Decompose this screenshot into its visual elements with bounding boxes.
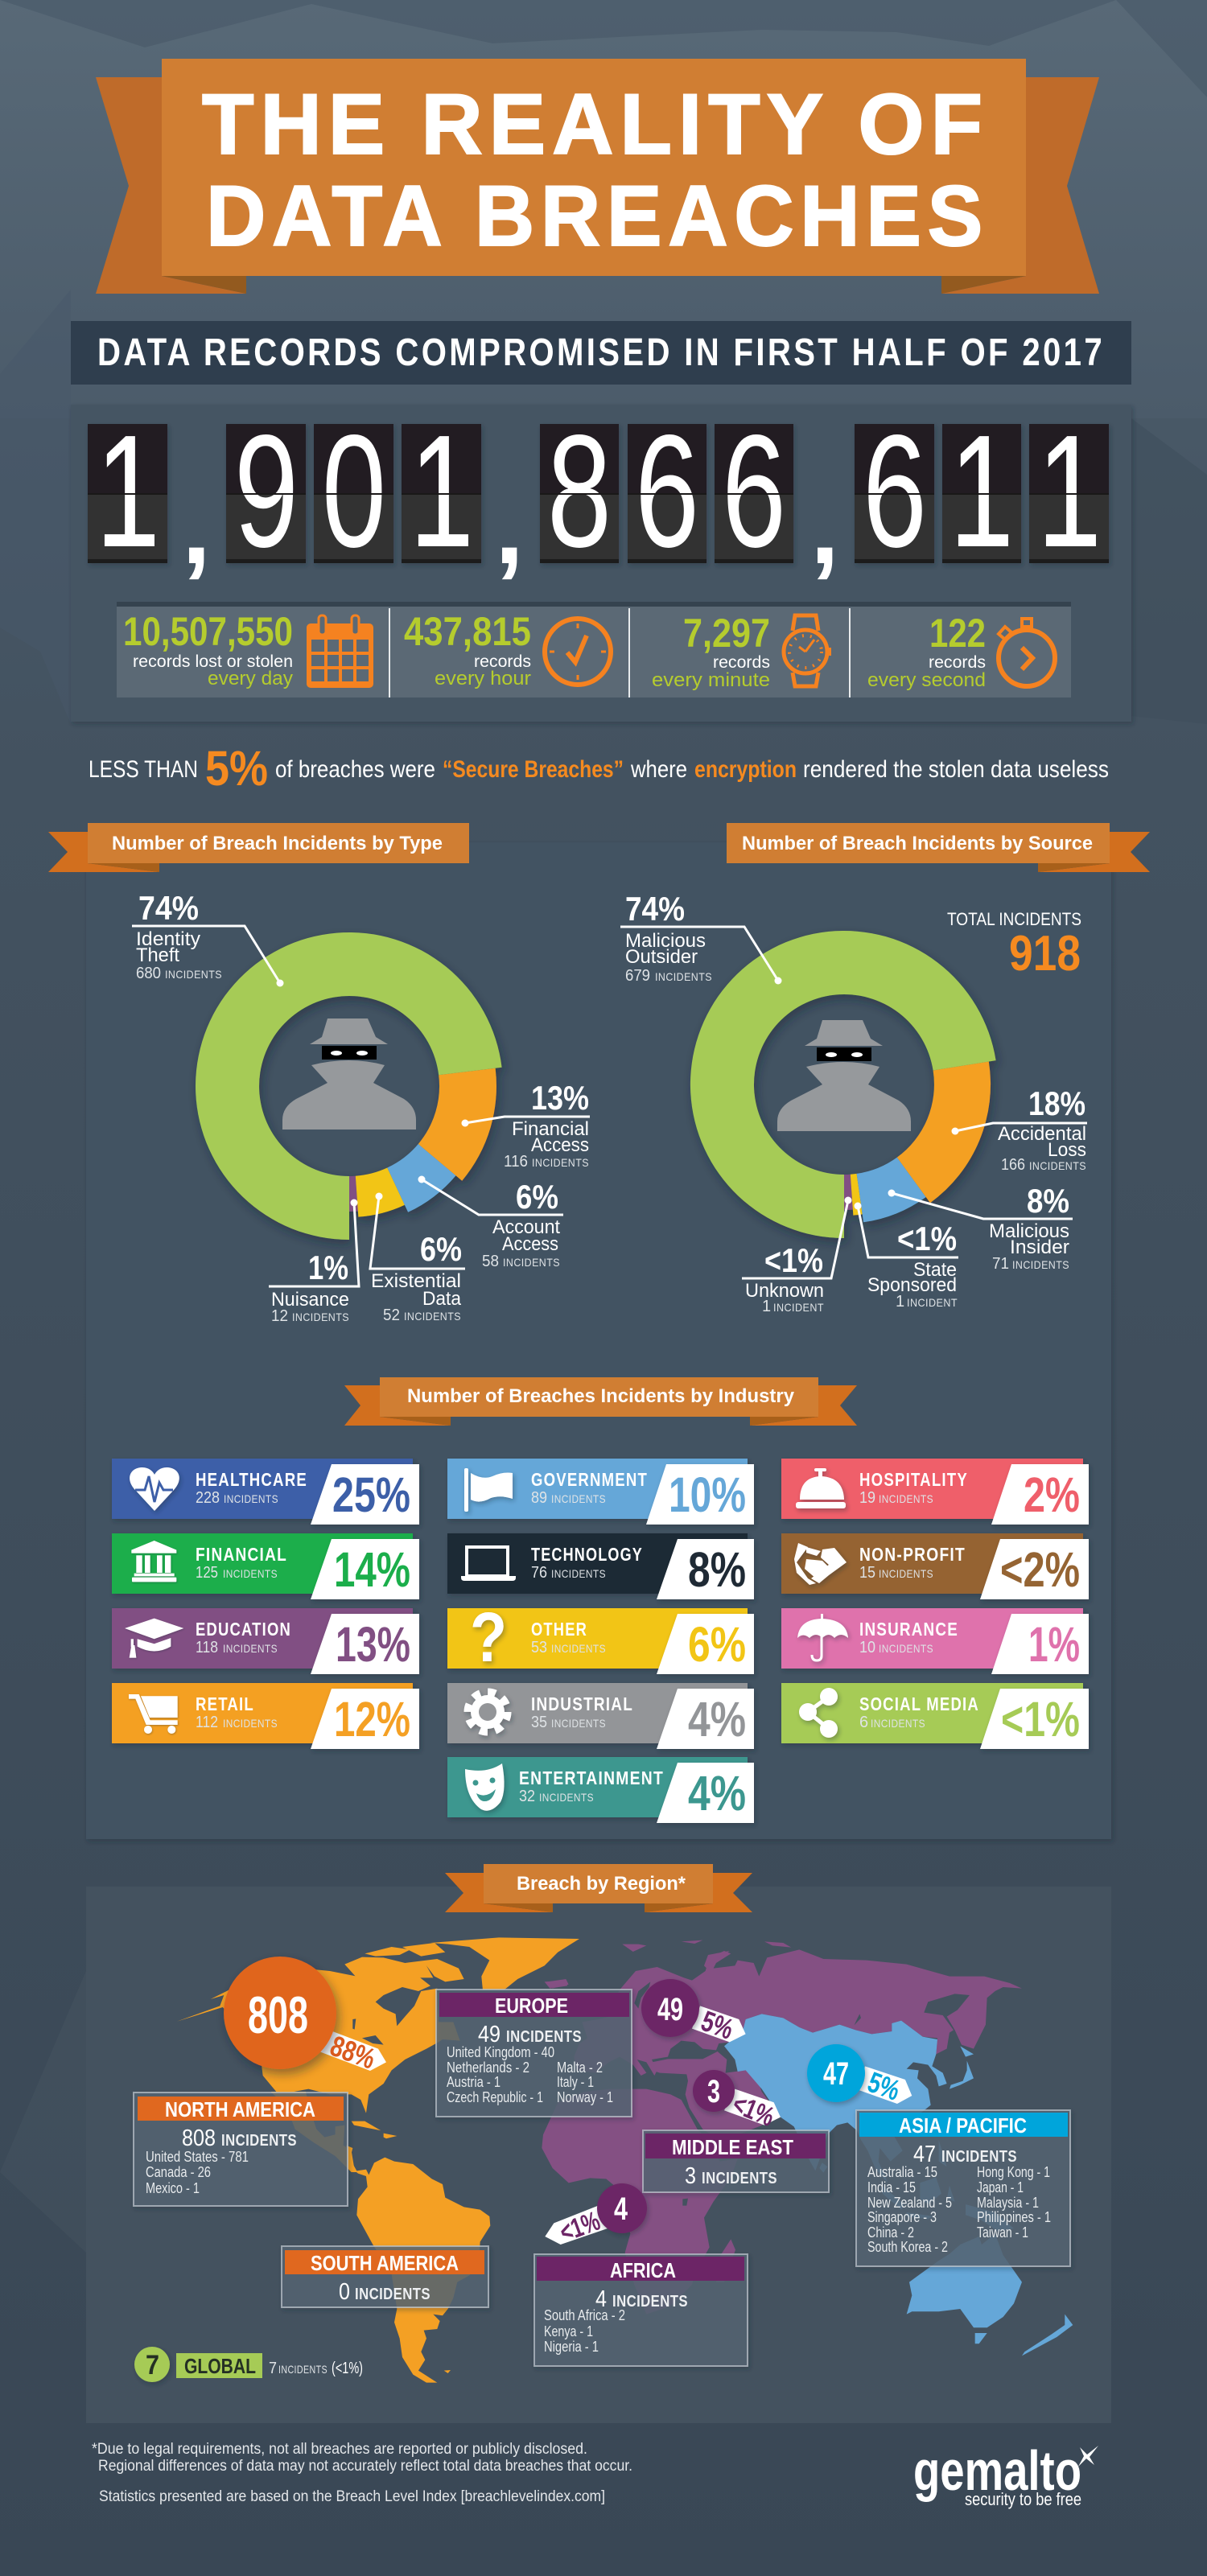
card: government [447, 1459, 754, 1525]
heading: incidents by type [48, 823, 469, 872]
stat: per minute: 7,297 [683, 611, 770, 656]
world map [177, 1937, 1073, 2383]
marker: asia pacific 47: 47 [823, 2056, 849, 2092]
stat: per hour [404, 609, 531, 689]
callout: unknown: Unknown [745, 1280, 824, 1302]
card: other: 53 [531, 1639, 547, 1656]
callout: north america: Canada - 26 [146, 2164, 211, 2180]
card: entertainment [447, 1757, 754, 1823]
callout: europe: 49 [478, 2022, 501, 2047]
secure breaches statement: where [630, 756, 687, 783]
title banner: THE REALITY OF [202, 76, 989, 172]
card: financial: 125 [196, 1564, 218, 1582]
flip counter digits: , [810, 468, 839, 586]
callout: south america [282, 2246, 488, 2307]
callout: africa: 4 [595, 2286, 607, 2312]
callout: europe: EUROPE [495, 1994, 568, 2018]
callout: state sponsored: <1% [897, 1220, 957, 1257]
callout: malicious insider: 71 [992, 1255, 1009, 1273]
panel: incidents background [86, 842, 1111, 1839]
stat: per day: records lost or stolen [133, 652, 293, 671]
heading: incidents by source: Number of Breach Incidents by Source [742, 833, 1093, 854]
callout: financial access [462, 1079, 590, 1171]
callout: asia pacific: ASIA / PACIFIC [899, 2113, 1027, 2138]
callout: existential data: 52 [383, 1307, 400, 1324]
callout: financial access: 13% [531, 1079, 589, 1117]
callout: europe [436, 1990, 632, 2117]
global incidents: 7 [269, 2360, 277, 2377]
card: social media: 6 [859, 1714, 868, 1731]
card: insurance: INCIDENTS [879, 1642, 933, 1655]
card: retail: 112 [196, 1714, 218, 1731]
icon: handshake [794, 1543, 847, 1585]
callout: north america [134, 2092, 348, 2206]
callout: nuisance: Nuisance [271, 1289, 349, 1311]
card: government: INCIDENTS [551, 1492, 606, 1505]
callout: asia pacific: Malaysia - 1 [977, 2195, 1039, 2211]
card: other: INCIDENTS [551, 1642, 606, 1655]
marker: asia pacific 47 [807, 2044, 912, 2107]
callout: identity theft: INCIDENTS [165, 968, 222, 981]
callout: middle east [643, 2130, 829, 2192]
card: technology: 76 [531, 1564, 547, 1582]
secure breaches statement [89, 741, 1109, 796]
title banner [96, 59, 1099, 294]
card: education: INCIDENTS [223, 1642, 278, 1655]
callout: accidental loss [951, 1084, 1087, 1174]
callout: account access: 58 [482, 1253, 499, 1270]
card: government: 89 [531, 1489, 547, 1507]
card: entertainment: 32 [519, 1788, 535, 1805]
callout: state sponsored: State [913, 1259, 957, 1281]
card: non-profit [781, 1533, 1089, 1599]
card: healthcare: INCIDENTS [224, 1492, 278, 1505]
card: social media: SOCIAL MEDIA [859, 1693, 979, 1714]
card: other: OTHER [531, 1619, 587, 1640]
card: non-profit: 15 [859, 1564, 875, 1582]
secure breaches statement: 5% [205, 741, 268, 796]
callout: identity theft: 74% [138, 889, 199, 927]
callout: malicious outsider: 679 [625, 967, 650, 985]
callout: nuisance: 1% [308, 1249, 348, 1286]
logo: gemalto: gemalto [913, 2439, 1081, 2502]
callout: asia pacific: New Zealand - 5 [867, 2195, 952, 2211]
global incidents: 7 [146, 2350, 159, 2381]
callout: unknown: 1 [762, 1298, 771, 1315]
callout: europe: Austria - 1 [447, 2074, 501, 2090]
secure breaches statement: encryption [694, 756, 797, 783]
card: healthcare [112, 1459, 419, 1525]
card: education: 13% [336, 1617, 410, 1672]
card: education: EDUCATION [196, 1619, 291, 1640]
donut chart: by source [620, 890, 1087, 1315]
footnotes [92, 2441, 632, 2505]
callout: account access [418, 1176, 563, 1270]
icon: spy [282, 1018, 416, 1130]
callout: nuisance: 12 [271, 1307, 288, 1325]
callout: unknown: <1% [764, 1241, 823, 1279]
callout: malicious insider: 8% [1027, 1182, 1069, 1220]
callout: nuisance: INCIDENTS [292, 1311, 349, 1323]
flip counter digits: 9 [234, 402, 299, 581]
callout: asia pacific [856, 2110, 1070, 2266]
callout: asia pacific: Philippines - 1 [977, 2209, 1051, 2225]
callout: malicious outsider: Outsider [625, 946, 698, 968]
secure breaches statement: rendered the stolen data useless [803, 756, 1109, 783]
callout: middle east: MIDDLE EAST [672, 2135, 793, 2159]
callout: existential data: INCIDENTS [404, 1310, 461, 1323]
stat: per hour: 437,815 [404, 609, 531, 654]
callout: malicious outsider [620, 890, 782, 985]
callout: asia pacific: 47 [913, 2142, 936, 2167]
callout: accidental loss: Loss [1048, 1139, 1086, 1161]
callout: africa: Nigeria - 1 [544, 2339, 599, 2355]
card: healthcare: HEALTHCARE [196, 1469, 307, 1490]
card: government: 10% [669, 1467, 746, 1522]
card: hospitality [781, 1459, 1089, 1525]
icon: wristwatch [784, 615, 831, 686]
card: industrial: INCIDENTS [551, 1717, 606, 1730]
callout: financial access: 116 [504, 1153, 528, 1171]
card: industrial: 35 [531, 1714, 547, 1731]
logo: gemalto: security to be free [965, 2489, 1081, 2509]
stat: per second: records [929, 653, 986, 672]
flip counter digits: , [182, 468, 211, 586]
map: asia and australia [724, 2014, 1073, 2356]
map: north america [177, 1937, 579, 2172]
flip counter digits: 0 [322, 402, 386, 581]
heading: breach by region [445, 1864, 752, 1912]
callout: financial access: INCIDENTS [532, 1156, 589, 1169]
callout: existential data: Existential [371, 1270, 461, 1292]
callout: north america: Mexico - 1 [146, 2180, 200, 2196]
callout: identity theft: Theft [136, 944, 179, 966]
icon: clock [545, 619, 611, 685]
callout: existential data: Data [422, 1288, 462, 1310]
callout: asia pacific: India - 15 [867, 2179, 916, 2195]
card: technology: 8% [688, 1542, 746, 1597]
card: insurance [781, 1608, 1089, 1674]
heading: incidents by industry [344, 1377, 857, 1426]
footnotes: Statistics presented are based on the Breach Level Index [breachlevelindex.com] [99, 2488, 605, 2505]
callout: malicious insider: INCIDENTS [1012, 1258, 1069, 1271]
card: education [112, 1608, 419, 1674]
title banner: DATA BREACHES [206, 167, 989, 264]
card: industrial: 4% [688, 1692, 746, 1747]
callout: asia pacific: Singapore - 3 [867, 2209, 937, 2225]
card: non-profit: <2% [1000, 1542, 1080, 1597]
card: other [447, 1599, 754, 1677]
flip counter digits [88, 402, 1109, 586]
card: insurance: 10 [859, 1639, 875, 1656]
icon: stopwatch [999, 619, 1055, 686]
stat: per day: 10,507,550 [123, 609, 293, 654]
callout: africa: INCIDENTS [612, 2293, 688, 2311]
global incidents: INCIDENTS [278, 2363, 327, 2376]
flip counter digits: , [495, 468, 524, 586]
callout: state sponsored: 1 [896, 1293, 904, 1311]
callout: africa: AFRICA [610, 2258, 676, 2282]
map: south america [346, 2146, 490, 2383]
heading: breach by region: Breach by Region* [517, 1873, 686, 1895]
flip counter digits: 6 [863, 402, 927, 581]
marker: north america 808: 808 [248, 1985, 308, 2044]
global incidents: (<1%) [332, 2360, 363, 2377]
callout: existential data [370, 1192, 465, 1324]
global incidents [134, 2347, 363, 2382]
marker: asia pacific 47: 5% [863, 2065, 904, 2107]
card: financial: FINANCIAL [196, 1544, 287, 1565]
icon: heart [130, 1467, 179, 1511]
card: entertainment: 4% [688, 1766, 746, 1821]
callout: unknown [742, 1197, 851, 1315]
card: social media: INCIDENTS [871, 1717, 925, 1730]
total incidents [947, 909, 1081, 981]
total incidents: 918 [1009, 926, 1081, 981]
callout: identity theft [132, 889, 283, 986]
callout: state sponsored [855, 1202, 958, 1311]
marker: europe 49: 5% [697, 2004, 738, 2046]
marker: europe 49: 49 [657, 1992, 683, 2027]
card: technology [447, 1533, 754, 1599]
marker: north america 808: 88% [326, 2029, 380, 2076]
card: hospitality: 2% [1024, 1467, 1080, 1522]
callout: malicious insider: Insider [1010, 1237, 1069, 1258]
icon: graduation cap [125, 1619, 183, 1658]
stat: per hour: records [474, 652, 531, 671]
flip counter digits: 1 [96, 402, 160, 581]
icon: question mark: ? [470, 1599, 507, 1677]
callout: europe: Italy - 1 [557, 2074, 594, 2090]
flip counter digits: 1 [1037, 402, 1102, 581]
callout: state sponsored: INCIDENT [907, 1296, 958, 1309]
callout: accidental loss: 18% [1028, 1084, 1085, 1122]
callout: asia pacific: China - 2 [867, 2224, 914, 2241]
callout: malicious insider: Malicious [989, 1220, 1069, 1242]
callout: financial access: Access [531, 1134, 589, 1156]
card: social media [781, 1683, 1089, 1749]
callout: nuisance [269, 1199, 359, 1325]
card: retail: INCIDENTS [223, 1717, 278, 1730]
icon: bank [131, 1541, 176, 1582]
stat: per second [867, 611, 986, 691]
callout: africa [534, 2254, 748, 2366]
card: industrial: INDUSTRIAL [531, 1693, 633, 1714]
callout: africa: South Africa - 2 [544, 2307, 625, 2323]
card: government: GOVERNMENT [531, 1469, 648, 1490]
callout: unknown: INCIDENT [773, 1301, 824, 1314]
subheading bar [71, 321, 1131, 385]
callout: south america: INCIDENTS [355, 2286, 430, 2303]
card: technology: TECHNOLOGY [531, 1544, 643, 1565]
callout: existential data: 6% [420, 1230, 462, 1268]
card: non-profit: INCIDENTS [879, 1567, 933, 1580]
card: healthcare: 228 [196, 1489, 220, 1507]
panel: region background [86, 1887, 1111, 2423]
card: entertainment: ENTERTAINMENT [519, 1767, 664, 1788]
icon: calendar [307, 615, 373, 688]
callout: malicious insider [888, 1182, 1073, 1273]
card: retail: RETAIL [196, 1693, 254, 1714]
callout: europe: Czech Republic - 1 [447, 2089, 543, 2105]
map: africa [542, 2089, 738, 2315]
callout: north america: 808 [182, 2125, 216, 2151]
callout: asia pacific: INCIDENTS [941, 2148, 1017, 2166]
card: social media: <1% [1001, 1692, 1080, 1747]
flip counter digits: 1 [950, 402, 1014, 581]
callout: north america: NORTH AMERICA [165, 2097, 315, 2121]
callout: accidental loss: INCIDENTS [1029, 1159, 1086, 1172]
callout: europe: Norway - 1 [557, 2089, 613, 2105]
marker: middle east 3: <1% [728, 2088, 778, 2133]
callout: state sponsored: Sponsored [867, 1274, 957, 1296]
card: industrial [447, 1683, 754, 1749]
callout: asia pacific: Japan - 1 [977, 2179, 1024, 2195]
stat: per minute: records [713, 653, 770, 672]
callout: europe: Netherlands - 2 [447, 2060, 529, 2076]
icon: gear [468, 1692, 508, 1732]
card: technology: INCIDENTS [551, 1567, 606, 1580]
callout: account access: INCIDENTS [503, 1256, 560, 1269]
callout: europe: Malta - 2 [557, 2060, 603, 2076]
callout: malicious outsider: INCIDENTS [655, 970, 712, 983]
flip counter digits: 1 [410, 402, 474, 581]
total incidents: TOTAL INCIDENTS [947, 909, 1081, 929]
card: insurance: 1% [1028, 1617, 1080, 1672]
card: financial: 14% [334, 1542, 410, 1597]
marker: north america 808 [224, 1957, 386, 2076]
card: hospitality: INCIDENTS [879, 1492, 933, 1505]
stat: per hour: every hour [435, 668, 531, 689]
footnotes: *Due to legal requirements, not all breaches are reported or publicly disclosed. [92, 2441, 587, 2458]
callout: north america: United States - 781 [146, 2149, 249, 2165]
panel: records counter [71, 402, 1131, 722]
flip counter digits: 6 [722, 402, 786, 581]
flip counter digits: 6 [635, 402, 699, 581]
callout: europe: INCIDENTS [506, 2028, 582, 2046]
card: financial: INCIDENTS [223, 1567, 278, 1580]
footnotes: Regional differences of data may not accurately reflect total data breaches that occur. [98, 2458, 632, 2475]
card: hospitality: HOSPITALITY [859, 1469, 968, 1490]
callout: malicious outsider: 74% [625, 890, 685, 928]
callout: asia pacific: South Korea - 2 [867, 2239, 948, 2255]
card: retail [112, 1683, 419, 1749]
card: healthcare: 25% [332, 1467, 410, 1522]
stats strip [117, 602, 1071, 697]
callout: accidental loss: 166 [1001, 1156, 1025, 1174]
callout: asia pacific: Australia - 15 [867, 2164, 937, 2180]
secure breaches statement: “Secure Breaches” [443, 756, 624, 783]
stat: per minute: every minute [652, 669, 770, 691]
marker: middle east 3 [693, 2070, 781, 2133]
global incidents: GLOBAL [184, 2354, 256, 2378]
marker: middle east 3: 3 [707, 2074, 720, 2109]
card: education: 118 [196, 1639, 218, 1656]
card: hospitality: 19 [859, 1489, 875, 1507]
heading: incidents by type: Number of Breach Incidents by Type [112, 833, 443, 854]
icon: umbrella [797, 1614, 848, 1660]
marker: europe 49 [641, 1979, 746, 2046]
heading: incidents by source [727, 823, 1150, 872]
card: retail: 12% [334, 1692, 410, 1747]
marker: africa 4: 4 [614, 2191, 628, 2227]
icon: theatre mask [465, 1763, 505, 1811]
icon: flag [464, 1468, 513, 1512]
callout: account access: Access [502, 1233, 558, 1255]
stat: per day [123, 609, 293, 689]
donut chart: by type [132, 889, 590, 1325]
card: financial [112, 1533, 419, 1599]
secure breaches statement: LESS THAN [89, 756, 198, 783]
callout: middle east: INCIDENTS [702, 2170, 777, 2187]
marker: africa 4: <1% [556, 2206, 604, 2249]
card: entertainment: INCIDENTS [539, 1791, 594, 1804]
callout: africa: Kenya - 1 [544, 2323, 593, 2339]
callout: asia pacific: Taiwan - 1 [977, 2224, 1028, 2241]
callout: middle east: 3 [685, 2163, 696, 2189]
card: insurance: INSURANCE [859, 1619, 958, 1640]
icon: spy [777, 1020, 911, 1131]
callout: europe: United Kingdom - 40 [447, 2044, 554, 2060]
icon: shopping cart [129, 1694, 178, 1734]
marker: africa 4 [545, 2183, 647, 2249]
callout: north america: INCIDENTS [221, 2132, 297, 2150]
card: other: 6% [688, 1617, 746, 1672]
callout: asia pacific: Hong Kong - 1 [977, 2164, 1050, 2180]
callout: malicious outsider: Malicious [625, 930, 706, 952]
map: europe and russia [545, 1940, 1022, 2136]
stat: per day: every day [208, 668, 293, 689]
card: non-profit: NON-PROFIT [859, 1544, 966, 1565]
icon: share [799, 1688, 838, 1738]
stat: per second: 122 [929, 611, 986, 656]
callout: identity theft: Identity [136, 928, 200, 950]
callout: account access: 6% [516, 1178, 558, 1216]
callout: financial access: Financial [512, 1118, 589, 1140]
callout: identity theft: 680 [136, 965, 161, 982]
callout: south america: 0 [339, 2279, 350, 2305]
stat: per second: every second [867, 669, 986, 691]
icon: laptop [461, 1547, 516, 1581]
flip counter digits: 8 [547, 402, 612, 581]
icon: service bell [796, 1468, 846, 1508]
callout: accidental loss: Accidental [998, 1123, 1086, 1145]
stat: per minute [652, 611, 770, 691]
secure breaches statement: of breaches were [275, 756, 435, 783]
callout: south america: SOUTH AMERICA [311, 2251, 459, 2275]
heading: incidents by industry: Number of Breaches Incidents by Industry [407, 1385, 795, 1407]
callout: account access: Account [492, 1216, 560, 1238]
